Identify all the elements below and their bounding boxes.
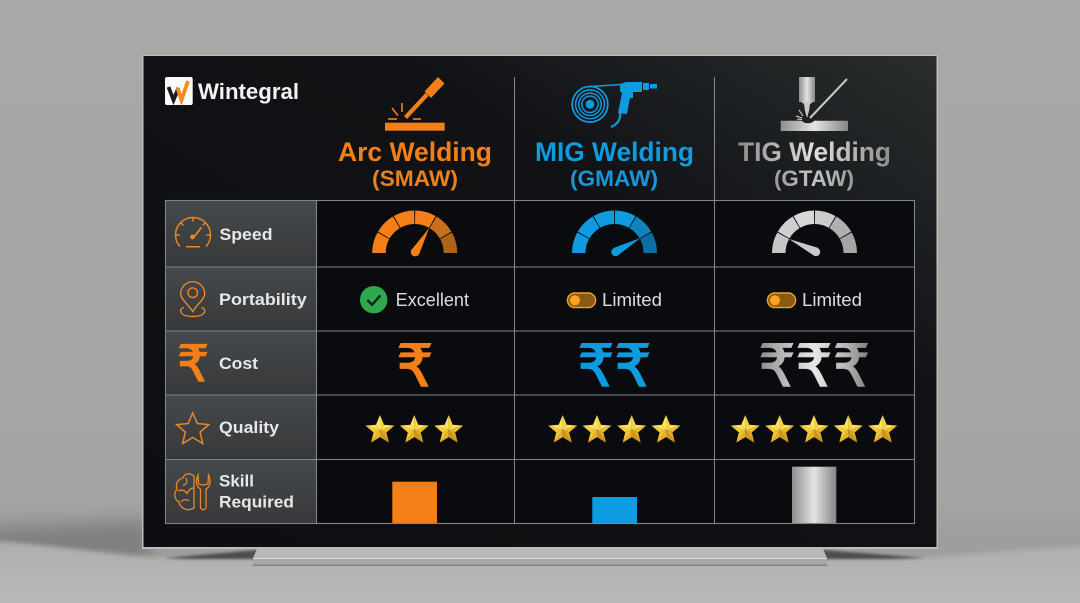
label: Skill Required: Required	[219, 493, 294, 512]
icon: arc welding electrode	[385, 77, 445, 131]
column: TIG Welding header: TIG Welding	[738, 137, 891, 167]
rating: MIG four stars	[548, 415, 681, 443]
column: Arc Welding header	[338, 77, 492, 191]
gauge: Arc speed	[379, 213, 454, 256]
cost: MIG two rupees: ₹	[578, 332, 614, 400]
rating: TIG five stars	[731, 415, 897, 443]
logo: Wintegral: Wintegral	[198, 79, 299, 104]
status: TIG Limited	[767, 290, 862, 310]
row: Cost: Cost	[219, 354, 258, 373]
row: Skill Required	[175, 467, 836, 524]
row: Cost	[177, 332, 870, 400]
table cell backgrounds	[166, 200, 914, 524]
label: Skill Required	[219, 472, 294, 512]
column: TIG Welding header	[738, 77, 891, 191]
status: MIG Limited	[567, 290, 662, 310]
row: Portability	[181, 282, 862, 316]
monitor stand	[253, 549, 827, 566]
column: Arc Welding header: (SMAW)	[372, 166, 458, 191]
row: Speed: Speed	[220, 225, 272, 244]
bar: TIG skill	[792, 467, 836, 524]
logo: Wintegral	[165, 77, 299, 105]
bar: MIG skill	[592, 497, 637, 524]
column: MIG Welding header: (GMAW)	[570, 166, 658, 191]
cost: TIG three rupees: ₹	[833, 332, 870, 400]
cost: TIG three rupees: ₹	[759, 332, 795, 400]
stand shadow	[165, 550, 926, 559]
icon: speedometer outline	[176, 217, 211, 247]
gauge: TIG speed	[779, 213, 854, 256]
row: Quality	[177, 413, 897, 444]
status: Excellent: Excellent	[396, 290, 469, 310]
icon: MIG wire spool and gun	[572, 82, 657, 127]
status: MIG Limited: Limited	[602, 290, 662, 310]
cost: TIG three rupees	[759, 332, 870, 400]
row: Portability: Portability	[219, 290, 307, 309]
column: MIG Welding header	[535, 82, 694, 191]
column: MIG Welding header: MIG Welding	[535, 137, 694, 167]
status: Excellent	[360, 286, 469, 313]
column: TIG Welding header: (GTAW)	[774, 166, 854, 191]
row: Quality: Quality	[219, 418, 280, 437]
display panel	[142, 55, 938, 549]
column: Arc Welding header: Arc Welding	[338, 137, 492, 167]
label: Skill Required: Skill	[219, 472, 254, 491]
row: Speed	[176, 213, 854, 256]
icon: brain and wrench	[175, 474, 210, 510]
icon: TIG torch, filler rod and plate	[781, 77, 848, 131]
cost: Arc one rupee: ₹	[397, 332, 433, 400]
gauge: MIG speed	[579, 213, 654, 256]
icon: rupee: ₹	[177, 335, 209, 393]
rating: Arc three stars	[365, 415, 463, 443]
status: TIG Limited: Limited	[802, 290, 862, 310]
icon: star outline	[177, 413, 209, 444]
cost: TIG three rupees: ₹	[796, 332, 832, 400]
cost: MIG two rupees: ₹	[615, 332, 651, 400]
bar: Arc skill	[392, 482, 437, 524]
icon: Wintegral W mark	[165, 77, 193, 105]
cost: MIG two rupees	[578, 332, 651, 400]
icon: location pin	[181, 282, 205, 316]
